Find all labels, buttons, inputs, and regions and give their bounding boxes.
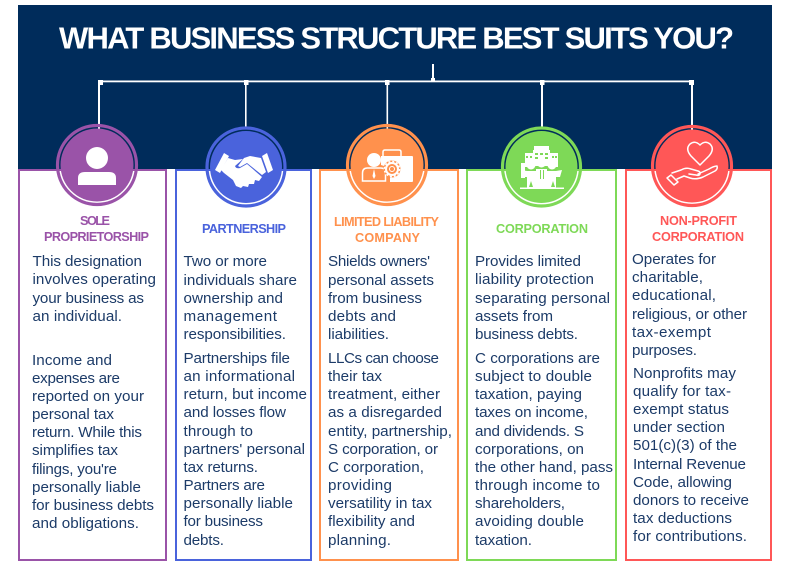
connector tree xyxy=(98,64,694,131)
body text: corporation: separating personal xyxy=(475,290,610,307)
body text: corporation: avoiding double xyxy=(475,513,584,530)
body text: sole proprietorship: return. While this xyxy=(32,424,142,441)
body text: sole proprietorship: for business debts xyxy=(32,497,154,514)
body text: corporation xyxy=(475,253,613,549)
body text: corporation: and dividends. S xyxy=(475,423,584,440)
heading: sole proprietorship: PROPRIETORSHIP xyxy=(44,230,150,244)
heading: non-profit corporation xyxy=(652,214,744,244)
panel: partnership xyxy=(176,128,311,560)
body text: sole proprietorship: reported on your xyxy=(32,388,144,405)
body text: non-profit corporation: purposes. xyxy=(632,342,697,359)
body text: limited liability company: S corporation, or xyxy=(328,441,438,458)
heading: partnership: PARTNERSHIP xyxy=(202,222,287,236)
heading: non-profit corporation: NON-PROFIT xyxy=(660,214,737,228)
body text: limited liability company: versatility in tax xyxy=(328,495,432,512)
heading: limited liability company: COMPANY xyxy=(355,231,421,245)
body text: non-profit corporation: tax-exempt xyxy=(632,324,712,341)
body text: non-profit corporation: for contributions. xyxy=(633,528,747,545)
body text: partnership: personally liable xyxy=(184,495,293,512)
body text: partnership: responsibilities. xyxy=(184,326,286,343)
body text: non-profit corporation: Operates for xyxy=(632,251,716,268)
body text: corporation: assets from xyxy=(475,308,553,325)
body text: limited liability company: from business xyxy=(328,290,422,307)
body text: limited liability company: planning. xyxy=(328,532,391,549)
body text: corporation: taxation, paying xyxy=(475,386,582,403)
body text: non-profit corporation: educational, xyxy=(632,287,716,304)
body text: partnership: through to xyxy=(184,423,253,440)
body text: sole proprietorship: and obligations. xyxy=(32,515,139,532)
heading: limited liability company xyxy=(334,215,440,245)
heading: non-profit corporation: CORPORATION xyxy=(652,230,744,244)
body text: limited liability company: Shields owners' xyxy=(328,253,430,270)
body text: sole proprietorship: filings, you're xyxy=(32,461,117,478)
heading: sole proprietorship xyxy=(44,214,150,244)
body text: partnership: tax returns. xyxy=(184,459,258,476)
body text: limited liability company: debts and xyxy=(328,308,396,325)
body text: partnership: partners' personal xyxy=(184,441,305,458)
body text: limited liability company: flexibility and xyxy=(328,513,415,530)
body text: partnership: ownership and xyxy=(184,290,283,307)
heading: sole proprietorship: SOLE xyxy=(80,214,110,228)
body text: partnership: for business xyxy=(184,513,263,530)
body text: corporation: the other hand, pass xyxy=(475,459,613,476)
body text: corporation: corporations, on xyxy=(475,441,584,458)
icon: hand holding heart xyxy=(652,126,732,206)
body text: non-profit corporation: religious, or other xyxy=(632,306,747,323)
body text: limited liability company: as a disregarded xyxy=(328,404,442,421)
body text: non-profit corporation: Internal Revenue xyxy=(633,456,746,473)
body text: non-profit corporation: qualify for tax- xyxy=(633,383,731,400)
panel: non-profit corporation xyxy=(626,126,771,560)
body text: partnership: debts. xyxy=(184,532,224,549)
body text: sole proprietorship: an individual. xyxy=(32,308,122,325)
body text: non-profit corporation: charitable, xyxy=(632,269,703,286)
body text: non-profit corporation: donors to receive xyxy=(633,492,749,509)
body text: corporation: shareholders, xyxy=(475,495,565,512)
icon: person xyxy=(58,126,136,204)
body text: non-profit corporation: tax deductions xyxy=(633,510,732,527)
body text: corporation: taxes on income, xyxy=(475,404,588,421)
heading: corporation: CORPORATION xyxy=(496,222,588,236)
panel: limited liability company xyxy=(320,126,458,560)
body text: non-profit corporation xyxy=(632,251,749,545)
body text: partnership: Two or more xyxy=(184,253,267,270)
body text: limited liability company: entity, partnership, xyxy=(328,423,452,440)
heading: limited liability company: LIMITED LIABILITY xyxy=(334,215,440,229)
body text: corporation: through income to xyxy=(475,477,600,494)
body text: partnership: an informational xyxy=(184,368,295,385)
body text: limited liability company: their tax xyxy=(328,368,382,385)
panel: sole proprietorship xyxy=(19,126,166,560)
body text: non-profit corporation: Nonprofits may xyxy=(633,365,736,382)
title: WHAT BUSINESS STRUCTURE BEST SUITS YOU? xyxy=(59,20,734,56)
body text: sole proprietorship xyxy=(32,253,156,532)
body text: limited liability company: C corporation, xyxy=(328,459,424,476)
body text: limited liability company: providing xyxy=(328,477,392,494)
body text: limited liability company xyxy=(328,253,452,549)
body text: corporation: taxation. xyxy=(475,532,532,549)
body text: limited liability company: personal assets xyxy=(328,272,434,289)
body text: partnership xyxy=(184,253,307,549)
body text: sole proprietorship: personal tax xyxy=(32,406,114,423)
body text: corporation: Provides limited xyxy=(475,253,581,270)
body text: corporation: C corporations are xyxy=(475,350,600,367)
body text: sole proprietorship: simplifies tax xyxy=(32,442,118,459)
body text: partnership: and losses flow xyxy=(184,404,286,421)
body text: sole proprietorship: Income and xyxy=(32,352,112,369)
body text: sole proprietorship: involves operating xyxy=(32,271,156,288)
body text: limited liability company: treatment, either xyxy=(328,386,440,403)
body text: sole proprietorship: personally liable xyxy=(32,479,141,496)
body text: sole proprietorship: expenses are xyxy=(32,370,120,387)
body text: corporation: liability protection xyxy=(475,271,594,288)
icon: buildings with people xyxy=(502,128,580,206)
body text: corporation: subject to double xyxy=(475,368,592,385)
header band xyxy=(18,5,772,169)
body text: partnership: individuals share xyxy=(184,272,297,289)
body text: non-profit corporation: exempt status xyxy=(633,401,729,418)
body text: partnership: return, but income xyxy=(184,386,307,403)
body text: partnership: Partners are xyxy=(184,477,265,494)
body text: partnership: management xyxy=(184,308,278,325)
icon: handshake xyxy=(207,128,285,206)
body text: non-profit corporation: under section xyxy=(633,419,725,436)
panel: corporation xyxy=(467,128,616,560)
body text: corporation: business debts. xyxy=(475,326,578,343)
body text: non-profit corporation: 501(c)(3) of the xyxy=(633,437,737,454)
body text: non-profit corporation: Code, allowing xyxy=(633,474,732,491)
body text: partnership: Partnerships file xyxy=(184,350,290,367)
body text: sole proprietorship: This designation xyxy=(32,253,142,270)
body text: sole proprietorship: your business as xyxy=(32,290,144,307)
body text: limited liability company: LLCs can choose xyxy=(328,350,439,367)
icon: businessperson with briefcase and gear xyxy=(348,126,426,204)
body text: limited liability company: liabilities. xyxy=(328,326,389,343)
